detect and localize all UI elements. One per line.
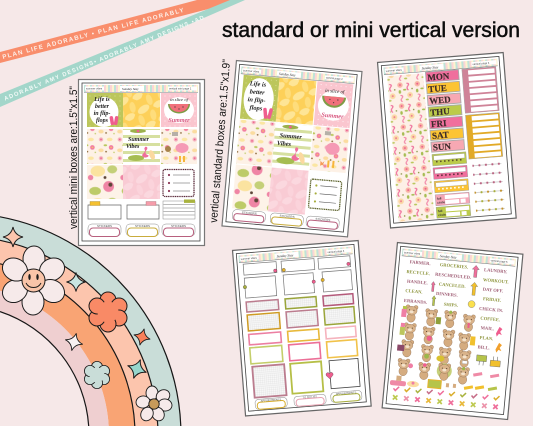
icon: teal star [124, 356, 150, 382]
sheet: vertical page 5 scripts and bears [382, 243, 523, 419]
script words: RECYCLE. [406, 269, 430, 276]
weekday labels: SUN [432, 141, 452, 153]
sheet header: vertical page 2 [326, 76, 343, 81]
sticker: slice of summer [314, 81, 353, 128]
rotated label: mini boxes: vertical mini boxes are:1.5"x1.5" [68, 86, 80, 229]
weekday labels: TUE [428, 83, 447, 94]
bear stickers [390, 304, 478, 392]
list panel: gold [465, 113, 503, 159]
sticker: summer vibes: Summer [128, 137, 150, 143]
sticker: life is better in flip-flops [240, 75, 280, 122]
sheet header [402, 249, 516, 266]
sticker: life is better in flip-flops: Life is [93, 97, 110, 103]
script words [400, 259, 510, 352]
lined box [163, 200, 195, 219]
script words: WORKOUT. [483, 277, 509, 284]
stickers label: pink [306, 216, 340, 230]
script words: CLEAN. [405, 288, 423, 295]
stickers label: gold [270, 213, 304, 226]
x marks [393, 395, 498, 409]
full box: olive: full [438, 209, 443, 213]
stickers label: gold: STICKERS [279, 214, 295, 219]
flamingo floral strip [387, 73, 434, 222]
weekday labels: WED [429, 94, 452, 106]
sticker: floral pattern [236, 120, 276, 167]
footer labels: TO DO LIST [302, 394, 317, 400]
script words: SHIPS. [444, 302, 458, 308]
sheet header: Sunday Stay [276, 253, 294, 259]
sticker: life is better in flip-flops: flops [249, 104, 263, 113]
stickers label: gold [126, 224, 159, 236]
large boxes [252, 358, 360, 398]
script words: DINNERS. [436, 291, 458, 298]
sheet: vertical standard page 2 [222, 61, 362, 237]
sticker: pink leaves [268, 168, 309, 215]
sheet header: vertical page 5 [491, 258, 508, 264]
sticker: yellow leaves [276, 78, 316, 125]
icon: teal sparkle [66, 272, 86, 292]
sheet header: summer vibes [386, 68, 403, 73]
arrow icons [429, 261, 480, 310]
footer labels: APPOINTMENTS [261, 397, 282, 403]
sticker: summer vibes [272, 123, 313, 170]
stickers label: mauve: STICKERS [97, 224, 112, 228]
banner: plan life adorably: PLAN LIFE ADORABLY • PLAN LIFE ADORABLY [2, 7, 186, 61]
white colored boxes [249, 326, 358, 364]
stickers label: gold: STICKERS [135, 224, 150, 228]
weekday labels: MON [427, 71, 450, 83]
full box: pink: full [437, 196, 442, 201]
sticker: summer vibes: Summer [279, 132, 303, 141]
sticker: summer vibes: Vibes [277, 140, 292, 148]
icon: smiley flower [0, 246, 69, 315]
sheet header [84, 85, 198, 92]
icon: daisy [135, 386, 173, 423]
sheet header: summer vibes [404, 250, 421, 256]
weekday labels: THU [430, 106, 450, 118]
sticker: life is better in flip-flops: flops [96, 118, 109, 124]
title: standard or mini vertical version [222, 19, 520, 42]
sticker: slice of summer: Summer [168, 118, 190, 124]
outline boxes with hearts [241, 256, 352, 298]
script words: RESCHEDULED. [435, 272, 471, 280]
script words: FRIDAY. [483, 296, 501, 303]
sheet header: Sunday Stay [279, 72, 296, 77]
banner: adorably amy designs: ADORABLY AMY DESIGNS• ADORABLY AMY DESIGNS •AD [3, 15, 206, 102]
sheet header: Sunday Stay [421, 65, 439, 71]
script words: BILL. [477, 344, 490, 351]
sheet header [241, 67, 355, 84]
script words: FARMER. [410, 259, 431, 266]
icon: white sparkle [63, 331, 85, 353]
sticker: floral pattern [87, 129, 123, 164]
sticker: life is better in flip-flops: in flip- [247, 96, 266, 105]
stickers label: pink: STICKERS [171, 224, 186, 228]
sheet header: summer vibes [86, 87, 103, 91]
heart box: pink [433, 165, 468, 179]
full box: pink [435, 192, 470, 206]
sticker: yellow leaves [123, 93, 160, 127]
script words: GROCERIES. [440, 262, 469, 270]
full box: olive [436, 205, 471, 218]
sticker: life is better in flip-flops [87, 93, 123, 127]
sheet: vertical page 3 weekdays [378, 53, 516, 228]
sticker: summer vibes [123, 129, 160, 164]
sticker: life is better in flip-flops: better [250, 88, 265, 97]
sheet header: summer vibes [241, 256, 258, 261]
stickers label: mauve [232, 209, 266, 223]
sheet header: Sunday Stay [440, 254, 457, 260]
icon: peach sparkle [3, 227, 23, 247]
sheet header: vertical mini page 1 [169, 87, 192, 91]
dot trackers [472, 159, 505, 215]
sticker: slice of summer: Summer [321, 112, 344, 121]
sticker: life is better in flip-flops: in flip- [94, 111, 110, 117]
full box: olive: circle [438, 213, 447, 217]
script words: CANCELED. [439, 282, 466, 289]
script words: COFFEE. [480, 316, 500, 322]
sheet: vertical mini page 1 [78, 80, 204, 246]
sticker: slice of summer [161, 93, 197, 127]
sticker: basket pattern [161, 129, 197, 164]
sheet header: Sunday Stay [122, 87, 139, 91]
sticker: basket pattern [310, 126, 349, 173]
sticker: slice of summer: in slice of [325, 89, 345, 96]
check marks [393, 386, 500, 400]
rainbow [0, 217, 181, 426]
sheet: vertical page 4 boxes [233, 241, 371, 416]
stickers label: mauve: STICKERS [242, 210, 257, 216]
sticker: life is better in flip-flops: Life is [248, 80, 267, 89]
weekday labels: SAT [432, 130, 449, 141]
script words: PLAN. [479, 335, 494, 341]
list panel: mauve [462, 67, 499, 113]
sheet header [383, 59, 498, 75]
banner: plan life adorably [0, 0, 243, 63]
weekday labels: FRI [431, 118, 447, 129]
icon: coral flower [89, 292, 127, 332]
script words: DAY OFF. [483, 287, 503, 294]
sticker: large floral [232, 164, 272, 211]
sticker: pink leaves [123, 165, 160, 199]
footer labels: APPOINTMENTS [336, 390, 357, 396]
stickers label: mauve [88, 224, 121, 236]
sticker: summer vibes: Vibes [126, 144, 140, 150]
sticker: checklist [163, 170, 194, 196]
rotated label: standard boxes: vertical standard boxes are:1.5"x1.9" [208, 59, 233, 223]
stickers label: pink: STICKERS [315, 217, 331, 222]
footer labels [255, 390, 362, 410]
heart box: yellow [434, 179, 469, 193]
stickers label: pink [162, 224, 195, 236]
banner: adorably amy designs [0, 0, 245, 107]
sticker: large floral [87, 165, 123, 199]
script words: MAIL. [480, 325, 494, 331]
icon: coral sparkle [132, 327, 152, 347]
sheet header: vertical page 4 [327, 249, 345, 254]
sticker: life is better in flip-flops: better [95, 104, 110, 110]
sheet header [238, 247, 353, 263]
sticker: checklist [308, 179, 342, 211]
sheet header: summer vibes [243, 68, 260, 74]
heart box: olive [432, 152, 467, 166]
grid boxes [246, 294, 355, 331]
full box: pink: circle [437, 200, 446, 205]
clip box: yellow tab [88, 202, 121, 219]
sheet header: vertical page 3 [472, 61, 490, 66]
script words: CHECK IN. [479, 306, 503, 313]
office supply stickers [464, 324, 504, 393]
weekday labels [425, 70, 465, 153]
icon: teal flower [84, 361, 110, 389]
script words: HANDLE. [407, 279, 428, 286]
script words: LAUNDRY. [484, 267, 508, 274]
script words: ERRANDS. [404, 298, 427, 305]
clip box: pink tab [127, 202, 159, 219]
sticker: slice of summer: in slice of [170, 97, 189, 102]
